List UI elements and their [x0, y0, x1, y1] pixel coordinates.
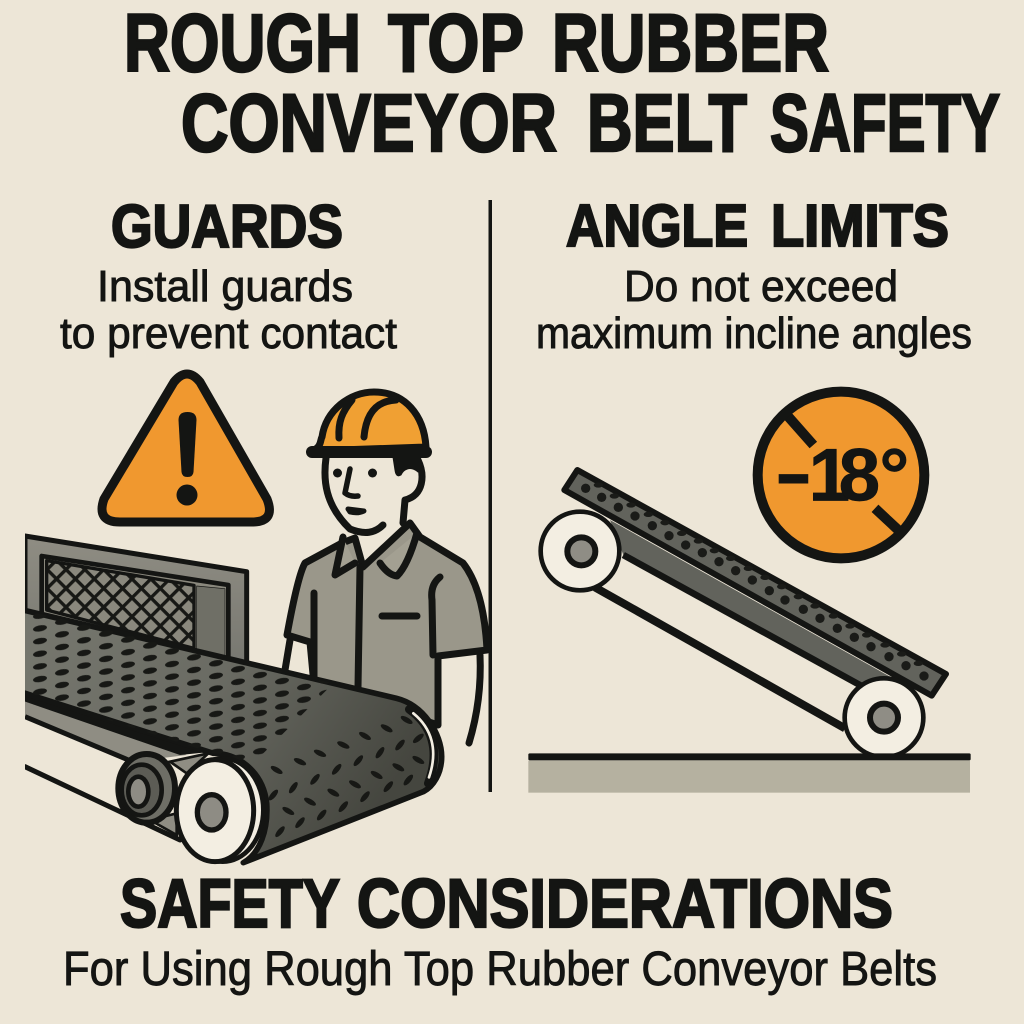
panel: guards: [20, 193, 487, 863]
sign value: −: [778, 449, 809, 507]
guard mesh: [47, 561, 194, 648]
footer subheading: For Using Rough Top Rubber Conveyor Belts: [63, 943, 937, 996]
illustration: conveyor belt with guard: [20, 536, 442, 863]
worker hard hat: [312, 392, 426, 452]
footer heading: CONSIDERATIONS: [357, 865, 893, 942]
title: CONVEYOR: [181, 78, 557, 169]
upper roller: [541, 512, 619, 590]
icon: warning triangle: [102, 374, 269, 522]
worker collar, placket and pocket: [285, 533, 480, 743]
text block: angle instruction: Do not exceed: [624, 262, 898, 311]
illustration: worker: [285, 392, 487, 743]
text block: guards instruction: to prevent contact: [60, 309, 397, 358]
text block: angle instruction: [536, 262, 972, 358]
worker shirt: [287, 523, 487, 725]
guard frame: [25, 536, 247, 667]
worker face: [325, 457, 422, 532]
panel: angle limits: [528, 193, 972, 793]
title: TOP: [388, 0, 524, 89]
small back roller: [118, 753, 208, 835]
text block: angle instruction: maximum incline angles: [536, 309, 972, 358]
heading: angle limits: [566, 193, 949, 259]
icon: 18 degree limit sign: [758, 392, 924, 558]
illustration: inclined conveyor and angle sign: [528, 392, 971, 793]
front white roller: [176, 758, 263, 862]
footer heading: [120, 865, 893, 942]
heading: guards: GUARDS: [111, 193, 343, 260]
incline belt: [564, 470, 946, 696]
side frame: [25, 692, 213, 840]
sign value: °: [879, 433, 909, 517]
conveyor underside: [595, 520, 890, 728]
title: BELT: [587, 78, 747, 169]
ground: [528, 753, 971, 793]
text block: guards instruction: [60, 262, 397, 358]
belt rough texture: [20, 609, 442, 863]
title: RUBBER: [552, 0, 829, 89]
title: [124, 0, 1000, 169]
title: ROUGH: [124, 0, 361, 89]
sign value: 18: [809, 433, 880, 517]
belt surface: [20, 609, 442, 863]
divider between panels: [488, 200, 492, 792]
footer heading: SAFETY: [120, 865, 340, 942]
text block: guards instruction: Install guards: [97, 262, 353, 311]
belt studs: [581, 482, 929, 681]
heading: angle limits: ANGLE: [566, 193, 748, 259]
lower roller: [845, 678, 923, 757]
sign value: [778, 433, 909, 517]
belt end crescent: [409, 709, 434, 783]
heading: angle limits: LIMITS: [771, 193, 949, 259]
